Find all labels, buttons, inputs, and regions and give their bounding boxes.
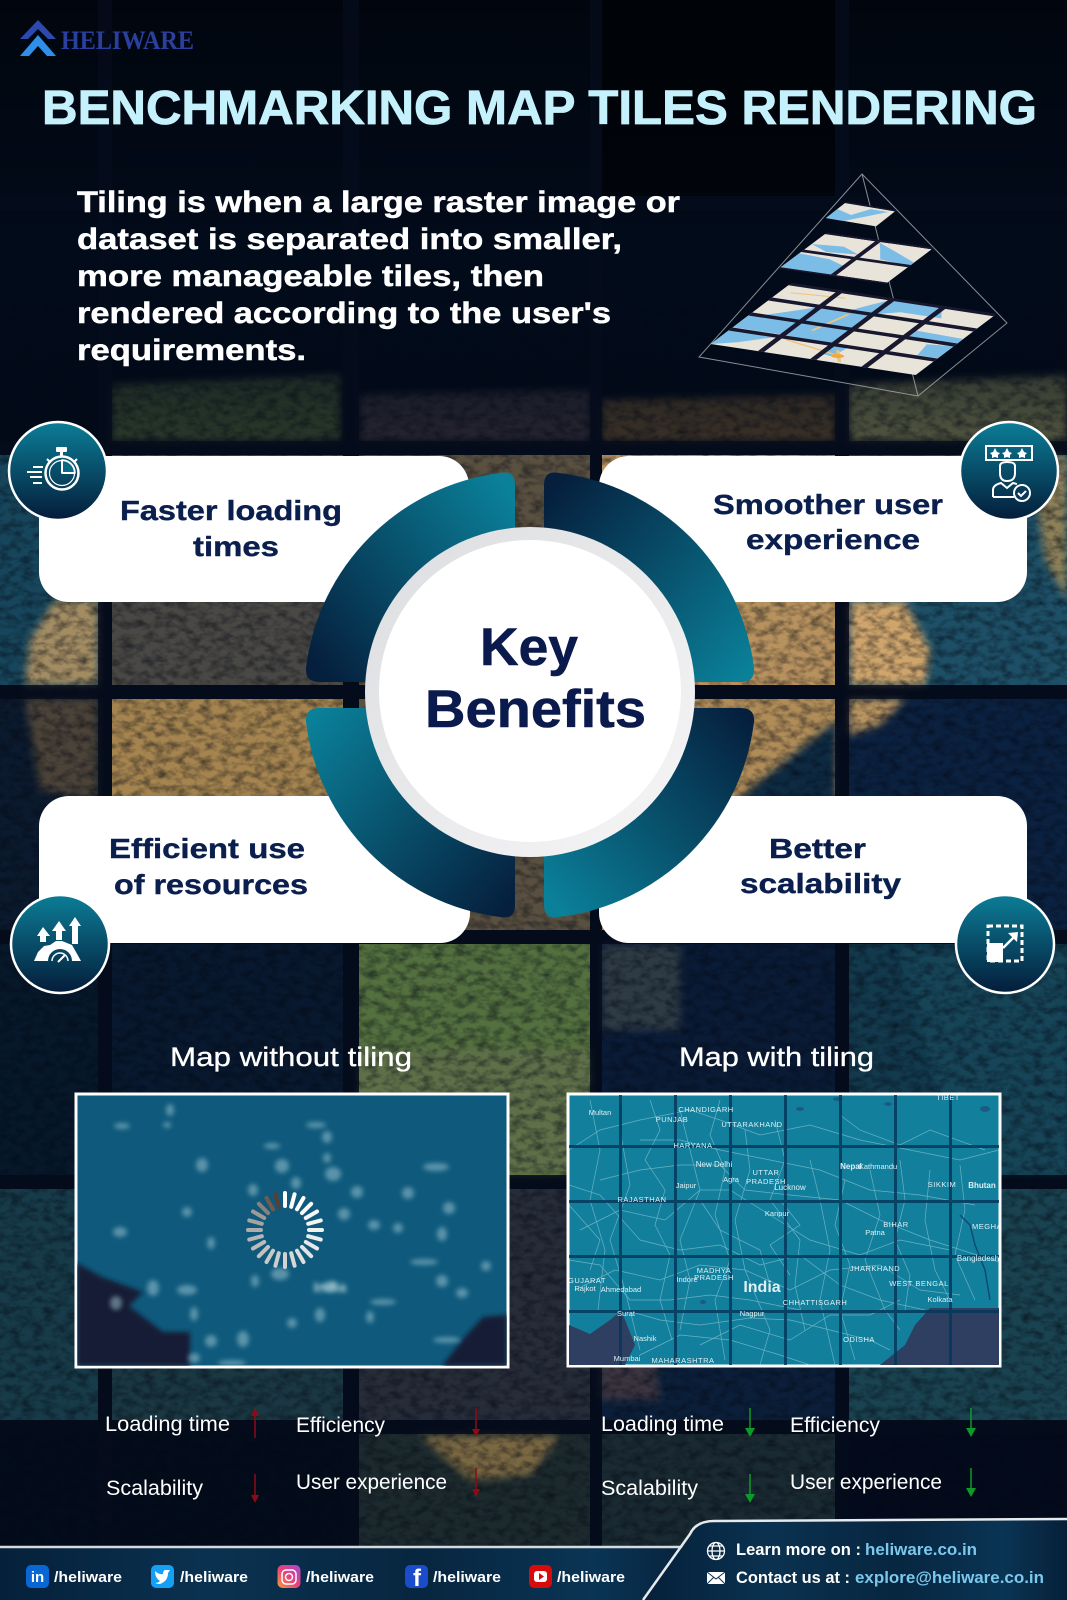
center heading: key benefits [425,618,646,739]
metrics: map with tiling: Loading time [601,1413,724,1436]
map with tiling: Agra [723,1175,740,1184]
card: faster loading times: Faster loading [120,495,342,526]
map with tiling: CHANDIGARH [678,1105,734,1114]
card: efficient use of resources: Efficient use [109,833,305,864]
metrics: map without tiling: Loading time [105,1413,230,1436]
social: youtube: /heliware [557,1569,625,1586]
card: smoother user experience: experience [746,524,920,555]
metrics: map without tiling: Scalability [106,1477,204,1500]
center heading: key benefits: Benefits [425,680,646,739]
social: twitter: /heliware [180,1569,248,1586]
social: linkedin: in [31,1569,44,1586]
intro text block: dataset is separated into smaller, [77,223,622,256]
key benefits ring [306,472,754,918]
card: faster loading times: times [193,531,279,562]
map with tiling: Jaipur [676,1181,697,1190]
map with tiling: SIKKIM [928,1180,956,1189]
map with tiling: Surat [617,1309,636,1318]
contact: website: Learn more on : [736,1541,861,1559]
map with tiling: TIBET [936,1093,960,1102]
intro text block: Tiling is when a large raster image or [77,186,680,219]
map with tiling: Kathmandu [859,1162,897,1171]
map with tiling: Indore [676,1275,698,1284]
social: twitter [151,1565,248,1588]
map with tiling: HARYANA [673,1141,713,1150]
map with tiling: CHHATTISGARH [783,1298,847,1307]
social: facebook: /heliware [433,1569,501,1586]
map with tiling: Kanpur [765,1209,790,1218]
social: instagram [278,1565,374,1588]
contact: website [708,1541,977,1560]
card: efficient use of resources: of resources [114,869,308,900]
loading spinner [248,1193,322,1267]
metrics: map without tiling: Efficiency [296,1414,385,1437]
map with tiling: PUNJAB [656,1115,688,1124]
card: better scalability: Better [769,833,866,864]
icon: stopwatch [9,422,107,520]
map with tiling: India [743,1279,781,1296]
card: efficient use of resources [39,796,470,943]
social: linkedin [26,1565,122,1588]
metrics: map with tiling [601,1408,976,1503]
map with tiling: Bhutan [968,1181,996,1190]
map with tiling: PRADESH [746,1177,786,1186]
map with tiling: New Delhi [696,1160,732,1169]
intro text block: requirements. [77,334,306,367]
icon: efficiency gauge with arrows [11,895,109,993]
social: facebook [405,1565,501,1592]
map with tiling: Patna [865,1228,886,1237]
map with tiling: UTTARAKHAND [721,1120,783,1129]
map with tiling: BIHAR [883,1220,909,1229]
map with tiling: Bangladesh [957,1254,999,1263]
card: better scalability [599,796,1027,943]
logo: Heliware: HELIWARE [61,26,194,55]
icon: scale expand [956,895,1054,993]
metrics: map without tiling: User experience [296,1471,447,1494]
footer band [0,1519,1067,1600]
map with tiling: JHARKHAND [850,1264,900,1273]
map with tiling: Lucknow [774,1183,806,1192]
metrics: map with tiling: User experience [790,1471,942,1494]
red arrows [251,1408,480,1503]
social: instagram: /heliware [306,1569,374,1586]
heading: map with tiling: Map with tiling [679,1042,874,1072]
map with tiling: Nagpur [740,1309,765,1318]
land masses [25,375,1067,1480]
social: linkedin: /heliware [54,1569,122,1586]
intro text block [77,186,680,367]
contact: website: heliware.co.in [865,1541,977,1559]
map with tiling: PRADESH [694,1273,734,1282]
contact: email [707,1569,1044,1587]
map with tiling: Rajkot [574,1284,597,1293]
map with tiling: RAJASTHAN [617,1195,667,1204]
center heading: key benefits: Key [480,618,579,677]
map with tiling: Multan [589,1108,611,1117]
map with tiling: Nashik [634,1334,657,1343]
map without tiling with spinner: India [314,1279,347,1295]
map with tiling: GUJARAT [568,1276,606,1285]
map with tiling: Kolkata [927,1295,953,1304]
map with tiling: MEGHA [972,1222,1002,1231]
map with tiling: MAHARASHTRA [651,1356,715,1365]
metrics: map with tiling: Efficiency [790,1414,880,1437]
card: smoother user experience: Smoother user [713,489,943,520]
social: youtube [529,1565,625,1588]
map with tiling: ODISHA [843,1335,875,1344]
map with tiling: Ahmedabad [601,1285,641,1294]
contact: email: Contact us at : [736,1569,850,1587]
contact: email: explore@heliware.co.in [855,1569,1044,1587]
map with tiling: UTTAR [753,1168,780,1177]
icon: user rating [960,422,1058,520]
card: better scalability: scalability [740,868,902,899]
pyramid of map tiles [699,174,1007,396]
map with tiling [568,1093,1002,1366]
map with tiling: MADHYA [697,1266,731,1275]
map with tiling: WEST BENGAL [889,1279,949,1288]
card: smoother user experience [599,456,1027,602]
map with tiling: Mumbai [614,1354,641,1363]
title: BENCHMARKING MAP TILES RENDERING [42,82,1037,135]
card: faster loading times [39,456,469,602]
green arrows [745,1408,976,1503]
metrics: map with tiling: Scalability [601,1477,699,1500]
intro text block: rendered according to the user's [77,297,611,330]
metrics: map without tiling [105,1408,480,1503]
map with tiling: Nepal [840,1162,862,1171]
map without tiling with spinner [76,1094,508,1367]
intro text block: more manageable tiles, then [77,260,544,293]
logo: Heliware [20,20,194,56]
social: facebook: f [413,1565,422,1592]
heading: map without tiling: Map without tiling [170,1042,412,1072]
